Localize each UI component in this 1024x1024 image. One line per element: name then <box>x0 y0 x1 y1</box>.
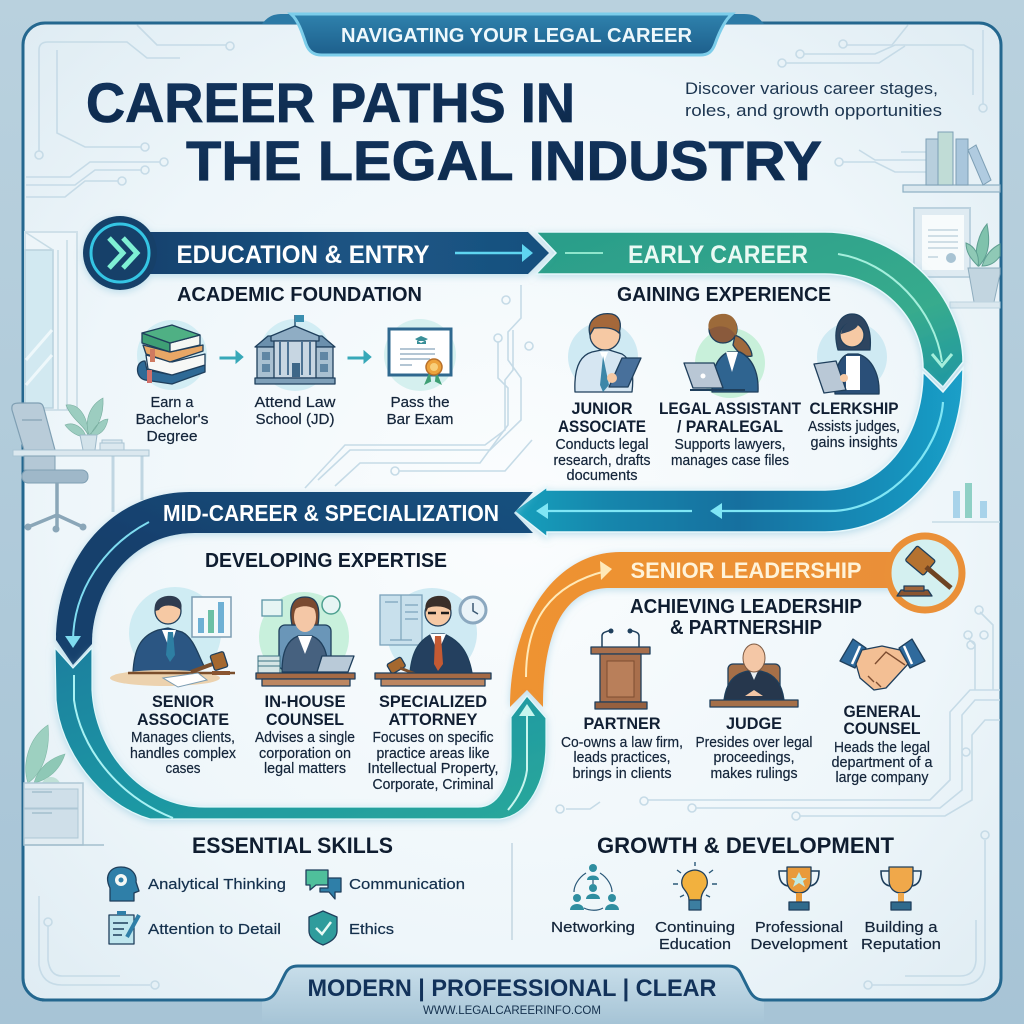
icon: podium with microphones <box>591 628 650 709</box>
role: specialized attorney <box>368 588 498 793</box>
item: continuing education <box>655 862 735 953</box>
icon: light bulb <box>673 862 717 910</box>
icon: network of people <box>570 864 619 910</box>
title: CAREER PATHS IN <box>86 71 575 134</box>
section heading: achieving leadership and partnership: & PARTNERSHIP <box>670 617 822 639</box>
role: junior associate <box>554 314 650 484</box>
label: leads practices, <box>574 750 670 766</box>
label: Bar Exam <box>386 412 454 428</box>
icon: ethics shield <box>309 911 337 945</box>
label: COUNSEL <box>844 720 920 738</box>
footer band <box>42 966 982 1024</box>
label: Co-owns a law firm, <box>561 735 683 751</box>
role: partner <box>561 628 683 782</box>
step: law school <box>254 315 336 428</box>
panel: growth and development <box>551 833 941 953</box>
role: general counsel <box>832 639 933 786</box>
top title tab: NAVIGATING YOUR LEGAL CAREER <box>341 25 693 47</box>
label: corporation on <box>259 746 351 762</box>
background: desk, chair and plant <box>12 398 149 532</box>
label: department of a <box>832 755 933 771</box>
icon: handshake <box>840 639 925 690</box>
section heading: gaining experience: GAINING EXPERIENCE <box>617 284 831 306</box>
label: large company <box>836 770 929 786</box>
icon: young man with tablet <box>568 314 641 392</box>
ribbon: early career: EARLY CAREER <box>628 241 808 269</box>
label: legal matters <box>264 761 346 777</box>
arrow <box>348 351 371 363</box>
background: potted plant on shelf <box>950 224 1000 308</box>
label: documents <box>566 468 638 484</box>
label: Networking <box>551 920 635 936</box>
background: framed certificate <box>914 208 970 277</box>
ribbon: teal return path <box>55 648 546 819</box>
label <box>368 693 498 793</box>
label: Earn a <box>150 395 194 411</box>
subtitle: roles, and growth opportunities <box>685 102 942 120</box>
label <box>861 920 941 953</box>
label: Continuing <box>655 920 735 936</box>
label: Intellectual Property, <box>368 761 498 777</box>
icon: diploma certificate <box>384 319 456 391</box>
icon: gavel badge <box>888 536 962 610</box>
label: SPECIALIZED <box>379 693 487 711</box>
label: School (JD) <box>256 412 334 428</box>
label: Corporate, Criminal <box>372 777 494 793</box>
title: THE LEGAL INDUSTRY <box>186 129 822 192</box>
label: research, drafts <box>554 453 650 469</box>
icon: attorney at desk with document and clock <box>375 588 491 686</box>
role: senior associate <box>110 587 237 777</box>
label: LEGAL ASSISTANT <box>659 400 801 418</box>
icon: attention to detail clipboard <box>109 911 139 944</box>
label: Focuses on specific <box>372 730 494 746</box>
label: ASSOCIATE <box>137 711 229 729</box>
label: Bachelor's <box>136 412 208 428</box>
label <box>136 395 208 445</box>
label: Development <box>750 937 848 953</box>
panel divider <box>511 843 513 940</box>
label: handles complex <box>130 746 237 762</box>
item: building a reputation <box>861 867 941 953</box>
section heading: academic foundation: ACADEMIC FOUNDATION <box>177 284 422 306</box>
icon: analytical thinking head <box>108 867 139 901</box>
label <box>254 395 336 428</box>
label: Education <box>659 937 731 953</box>
icon: communication bubbles <box>306 870 341 899</box>
label: JUNIOR <box>572 400 633 418</box>
label: PARTNER <box>584 715 661 733</box>
label: Presides over legal <box>696 735 812 751</box>
icon: woman with laptop <box>684 314 765 398</box>
label: Professional <box>755 920 843 936</box>
section heading: achieving leadership and partnership <box>630 596 862 639</box>
item: networking <box>551 864 635 936</box>
ribbon: mid-career and specialization: MID-CAREER & SPECIALIZATION <box>163 500 499 526</box>
label: brings in clients <box>572 766 672 782</box>
background: small bar chart <box>932 483 1000 522</box>
label: ATTORNEY <box>388 711 478 729</box>
role: clerkship <box>808 314 900 451</box>
ribbon: transition to mid-career (blue) <box>514 368 963 537</box>
label <box>659 400 801 469</box>
label: manages case files <box>671 453 789 469</box>
label <box>832 703 933 786</box>
label <box>808 400 900 451</box>
item: professional development <box>750 867 848 953</box>
label <box>255 693 355 777</box>
skill label: Attention to Detail <box>148 921 281 938</box>
ribbon: senior leadership: SENIOR LEADERSHIP <box>630 558 862 583</box>
ribbon: education and entry: EDUCATION & ENTRY <box>176 241 430 269</box>
role: legal assistant <box>659 314 801 469</box>
label: COUNSEL <box>266 711 344 729</box>
ribbon: mid-career and specialization <box>56 492 533 665</box>
title <box>86 71 822 192</box>
label: gains insights <box>810 435 898 451</box>
skill label: Analytical Thinking <box>148 876 286 893</box>
icon: trophy with star <box>779 867 819 910</box>
label: Degree <box>146 429 198 445</box>
label <box>130 693 237 777</box>
background: plant and cabinet <box>24 725 104 845</box>
label <box>386 395 454 428</box>
label: Building a <box>864 920 939 936</box>
section heading: developing expertise: DEVELOPING EXPERTISE <box>205 550 447 572</box>
icon: judge at bench <box>710 644 798 707</box>
label: Supports lawyers, <box>674 437 786 453</box>
skill label: Communication <box>349 876 465 893</box>
icon: woman with clipboard <box>814 314 887 394</box>
label: Attend Law <box>254 395 336 411</box>
heading: GROWTH & DEVELOPMENT <box>597 833 895 858</box>
label: Conducts legal <box>556 437 648 453</box>
label: Advises a single <box>255 730 355 746</box>
heading: ESSENTIAL SKILLS <box>192 833 393 858</box>
label: / PARALEGAL <box>677 418 783 436</box>
subtitle <box>685 80 942 120</box>
icon: stack of books <box>137 320 207 390</box>
label: Reputation <box>861 937 941 953</box>
step: bachelor's degree <box>136 320 208 445</box>
icon: counsel at desk with laptop <box>256 592 355 686</box>
label <box>554 400 650 484</box>
label <box>750 920 848 953</box>
label <box>561 715 683 782</box>
label: GENERAL <box>844 703 920 721</box>
panel: essential skills <box>108 833 465 945</box>
label: Heads the legal <box>834 740 930 756</box>
label <box>696 715 812 782</box>
label: ASSOCIATE <box>558 418 646 436</box>
icon: law school building <box>255 315 335 391</box>
label: Manages clients, <box>131 730 235 746</box>
footer band: WWW.LEGALCAREERINFO.COM <box>423 1005 601 1017</box>
step: bar exam <box>384 319 456 428</box>
section heading: achieving leadership and partnership: ACHIEVING LEADERSHIP <box>630 596 862 618</box>
background: bookshelf with books <box>903 132 1000 192</box>
role: judge <box>696 644 812 782</box>
label: proceedings, <box>714 750 794 766</box>
background: window <box>25 232 77 410</box>
label <box>655 920 735 953</box>
icon: trophy <box>881 867 921 910</box>
label: Assists judges, <box>808 419 900 435</box>
ribbon: early career <box>536 232 963 387</box>
ribbon: education and entry <box>83 216 549 290</box>
footer band: MODERN | PROFESSIONAL | CLEAR <box>308 975 716 1002</box>
ribbon: senior leadership <box>510 552 900 707</box>
arrow <box>220 351 243 363</box>
skill label: Ethics <box>349 921 394 938</box>
role: in-house counsel <box>255 592 355 777</box>
label: CLERKSHIP <box>810 400 898 418</box>
label: practice areas like <box>376 746 490 762</box>
label: JUDGE <box>726 715 782 733</box>
label: Pass the <box>390 395 450 411</box>
subtitle: Discover various career stages, <box>685 80 938 98</box>
label: SENIOR <box>152 693 214 711</box>
top title tab <box>262 14 764 55</box>
label: IN-HOUSE <box>264 693 346 711</box>
label: makes rulings <box>710 766 798 782</box>
icon: senior associate at desk with gavel <box>110 587 235 687</box>
label: cases <box>166 761 200 777</box>
